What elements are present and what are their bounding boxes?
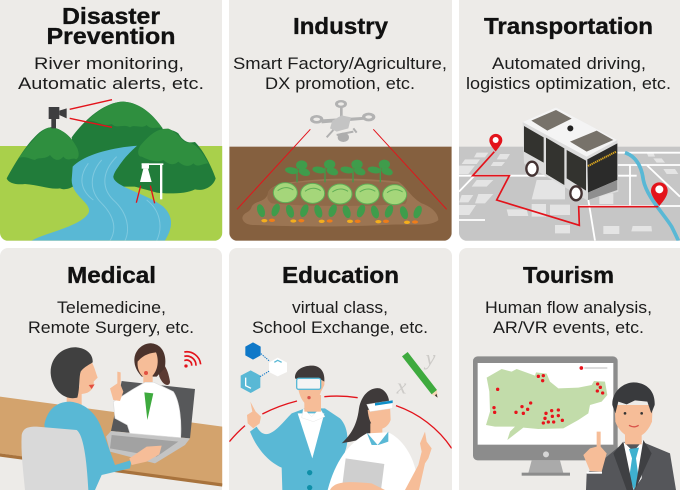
icon: camera on mountain — [49, 100, 112, 128]
description — [485, 299, 652, 337]
icon: drone — [310, 100, 375, 142]
icon: carrots — [255, 202, 424, 224]
illustration: mountains and river — [0, 100, 222, 243]
heading: Tourism — [523, 262, 614, 288]
description: Human flow analysis, — [485, 299, 652, 317]
patient — [21, 347, 162, 490]
illustration: drone over farm field — [229, 100, 452, 242]
heading: Industry — [293, 13, 388, 39]
math symbols: y — [424, 345, 436, 370]
icon: map pin start — [489, 134, 502, 152]
red arc — [229, 396, 452, 448]
monitor — [473, 356, 618, 476]
icon: wifi signal — [184, 352, 201, 368]
icon: autonomous bus — [523, 107, 618, 200]
heading: Medical — [67, 262, 156, 288]
heading: Transportation — [484, 13, 653, 39]
presenter — [583, 382, 676, 490]
icon: pencil — [402, 352, 438, 398]
panel: tourism — [459, 248, 680, 490]
icon: cabbages — [273, 183, 407, 205]
icon: river sensor — [136, 163, 163, 203]
description — [18, 55, 204, 93]
heading: Education — [282, 262, 399, 288]
icon: molecule hexagons — [241, 342, 287, 393]
legend — [584, 368, 608, 369]
icon: map pin end — [651, 182, 668, 206]
panel: medical — [0, 248, 222, 490]
panel: industry — [229, 0, 452, 242]
description — [252, 299, 428, 337]
description: River monitoring, — [34, 55, 184, 73]
desk — [0, 397, 222, 485]
description: DX promotion, etc. — [265, 75, 415, 93]
illustration: monitor with map and presenter — [473, 356, 676, 490]
heading: Disaster — [62, 3, 160, 29]
panel: disaster prevention: Prevention — [46, 23, 176, 49]
description: School Exchange, etc. — [252, 319, 428, 337]
description: Automatic alerts, etc. — [18, 75, 204, 93]
laptop — [106, 381, 195, 463]
panel: transportation — [459, 0, 680, 242]
description: Automated driving, — [492, 55, 646, 73]
panel: education — [229, 248, 452, 490]
math symbols — [396, 355, 436, 394]
icon: leafy seedlings — [285, 160, 394, 182]
description — [466, 55, 671, 93]
description: virtual class, — [292, 299, 388, 317]
description — [28, 299, 194, 337]
panel: disaster prevention — [0, 0, 222, 243]
description: AR/VR events, etc. — [493, 319, 644, 337]
doctor — [110, 343, 181, 438]
chair — [21, 427, 88, 490]
map data points — [492, 366, 604, 425]
math symbols: x — [396, 373, 407, 398]
illustration: map with autonomous bus — [459, 107, 680, 242]
description: Telemedicine, — [57, 299, 166, 317]
map roads — [459, 153, 680, 241]
illustration: VR class — [229, 342, 452, 490]
student — [328, 388, 432, 490]
illustration: telemedicine consultation — [0, 343, 222, 490]
description — [233, 55, 447, 93]
description: Smart Factory/Agriculture, — [233, 55, 447, 73]
teacher — [247, 366, 347, 490]
description: logistics optimization, etc. — [466, 75, 671, 93]
description: Remote Surgery, etc. — [28, 319, 194, 337]
regional map — [486, 369, 607, 440]
